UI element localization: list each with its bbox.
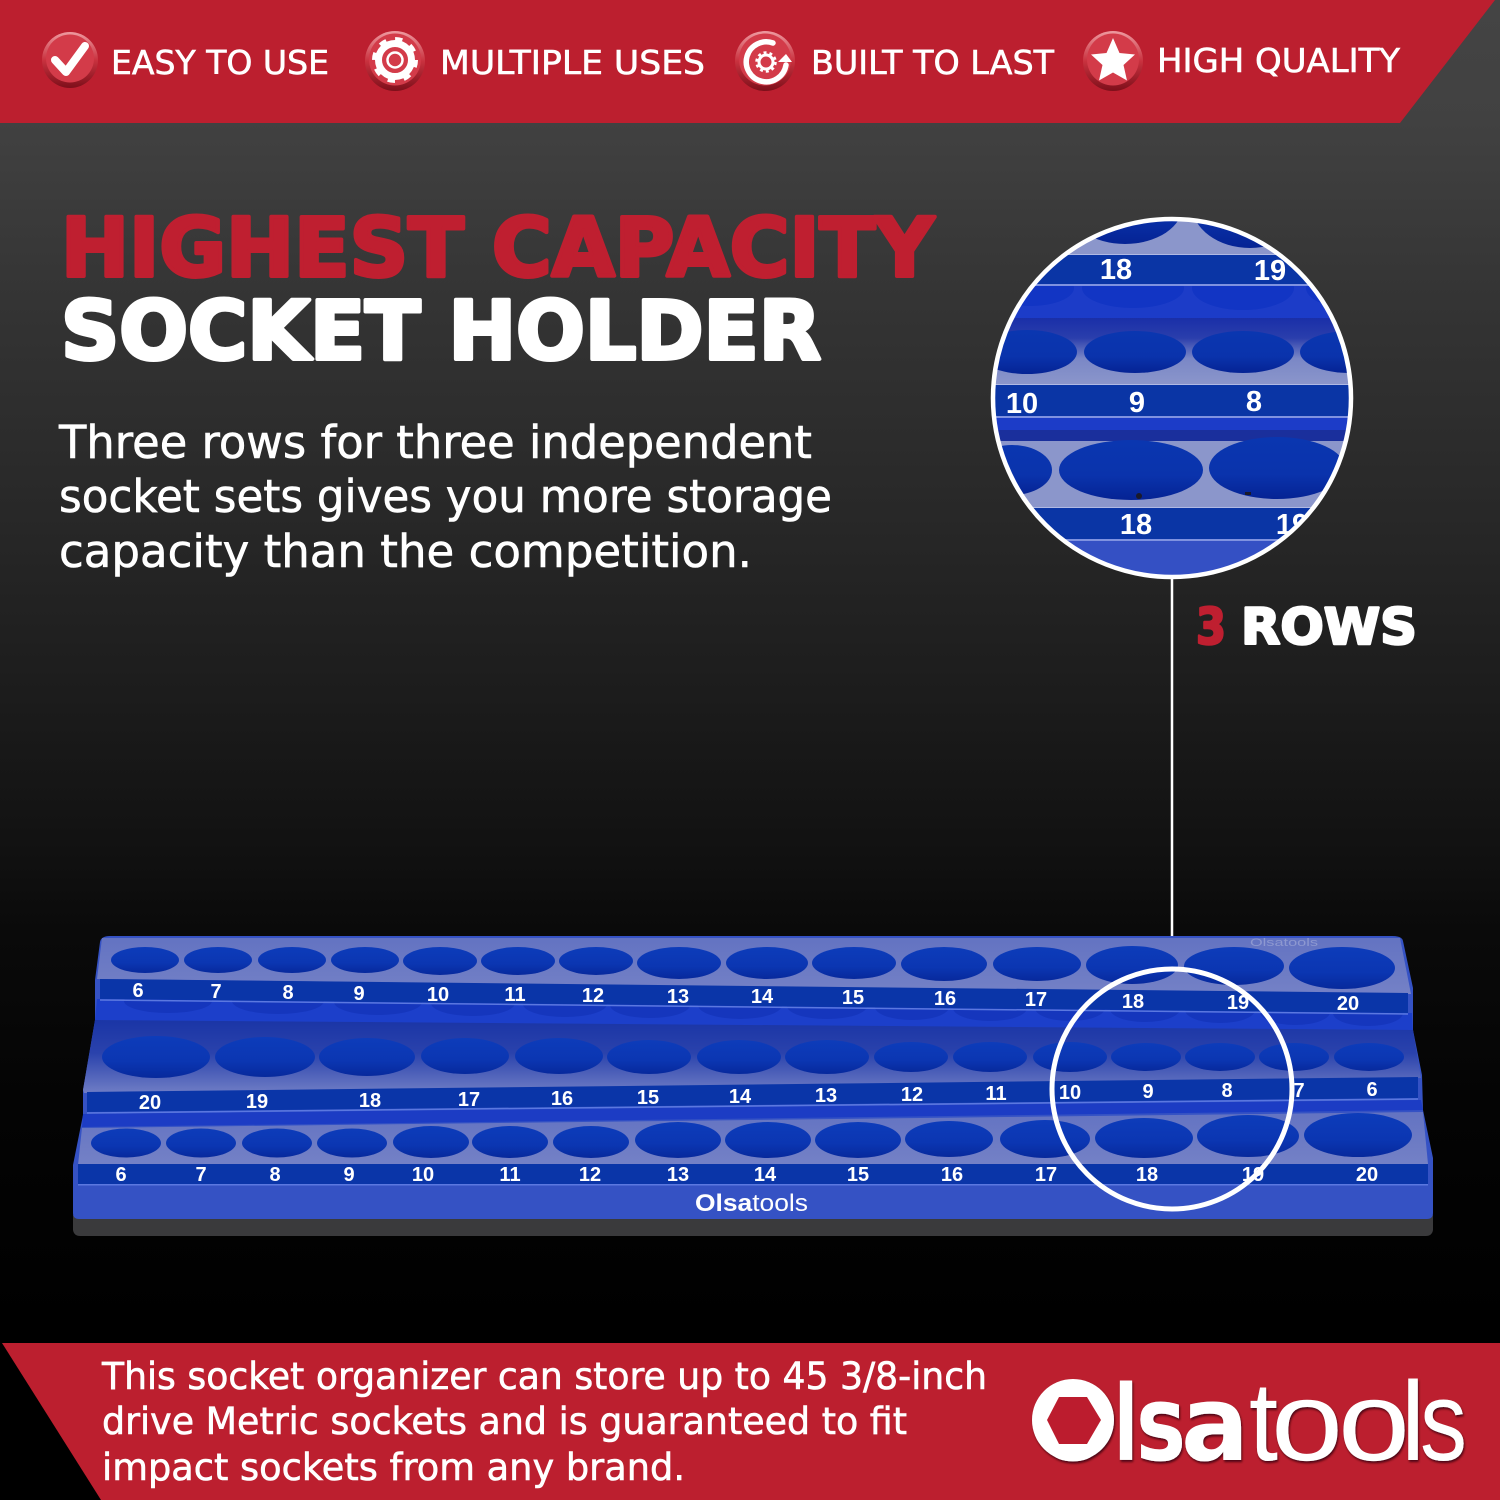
magnified detail circle: 18 xyxy=(1100,254,1132,286)
olsatools logo: s xyxy=(1136,1363,1186,1485)
olsatools logo: o xyxy=(1338,1359,1410,1484)
feature: high quality: HIGH QUALITY xyxy=(1157,41,1401,80)
holder logo small: Olsatools xyxy=(695,1190,808,1217)
middle row surface xyxy=(83,1020,1421,1093)
top row riser xyxy=(95,999,1413,1035)
middle row numbers: 14 xyxy=(729,1086,752,1108)
magnified detail circle: 8 xyxy=(1246,386,1262,418)
top row numbers xyxy=(132,980,1359,1015)
rubber base xyxy=(73,1215,1433,1236)
middle row numbers: 10 xyxy=(1059,1082,1081,1104)
body text: socket sets gives you more storage xyxy=(59,470,832,523)
middle row numbers: 8 xyxy=(1221,1080,1233,1102)
olsatools logo: l xyxy=(1401,1359,1425,1484)
bottom row numbers: 7 xyxy=(195,1164,207,1186)
top row numbers: 12 xyxy=(582,985,604,1007)
magnified detail circle: 9 xyxy=(1129,387,1145,419)
bottom row numbers xyxy=(115,1164,1378,1186)
middle row numbers: 17 xyxy=(458,1089,480,1111)
middle row numbers: 7 xyxy=(1293,1080,1305,1102)
top row numbers: 8 xyxy=(282,982,294,1004)
bottom row numbers: 18 xyxy=(1136,1164,1158,1186)
top row numbers: 7 xyxy=(210,981,222,1003)
middle row numbers: 15 xyxy=(637,1087,659,1109)
bottom row numbers: 9 xyxy=(343,1164,355,1186)
socket holder product xyxy=(73,936,1433,1236)
feature: easy to use: EASY TO USE xyxy=(111,43,329,82)
feature: built to last xyxy=(735,31,1055,91)
holder body xyxy=(73,936,1433,1219)
bottom row numbers: 15 xyxy=(847,1164,869,1186)
top row surface xyxy=(97,938,1411,994)
top row number band xyxy=(100,979,1408,1014)
olsatools logo: l xyxy=(1114,1363,1138,1485)
middle row numbers: 19 xyxy=(246,1091,268,1113)
top row numbers: 19 xyxy=(1227,992,1249,1014)
feature: easy to use xyxy=(42,32,329,88)
magnified detail circle: 19 xyxy=(1254,255,1286,287)
middle row numbers: 9 xyxy=(1142,1081,1154,1103)
middle row numbers: 16 xyxy=(551,1088,573,1110)
title: HIGHEST CAPACITY xyxy=(61,202,935,296)
bottom row number band xyxy=(78,1164,1428,1186)
olsatools logo: s xyxy=(1420,1359,1467,1484)
embossed logo: Olsatools xyxy=(1250,937,1319,949)
middle row numbers xyxy=(139,1079,1378,1114)
bottom row numbers: 20 xyxy=(1356,1164,1378,1186)
middle row lip xyxy=(82,1100,1423,1127)
middle row numbers: 6 xyxy=(1366,1079,1378,1101)
description text xyxy=(101,1355,987,1489)
middle row numbers: 18 xyxy=(359,1090,381,1112)
bottom row numbers: 19 xyxy=(1242,1164,1264,1186)
middle row numbers: 12 xyxy=(901,1084,923,1106)
top banner xyxy=(0,0,1495,123)
bottom row sockets xyxy=(91,1113,1412,1158)
olsatools logo: O xyxy=(1034,1362,1112,1485)
magnified detail circle xyxy=(990,216,1354,580)
middle row sockets xyxy=(102,1036,1404,1078)
description text: impact sockets from any brand. xyxy=(102,1446,685,1489)
olsatools logo xyxy=(1032,1359,1467,1485)
body text: capacity than the competition. xyxy=(59,525,752,578)
top row numbers: 20 xyxy=(1337,993,1359,1015)
bottom row numbers: 14 xyxy=(754,1164,777,1186)
olsatools logo: a xyxy=(1181,1363,1249,1485)
bottom banner xyxy=(2,1343,1500,1500)
olsatools logo: t xyxy=(1249,1359,1278,1484)
title: SOCKET HOLDER xyxy=(61,285,821,379)
bottom row numbers: 17 xyxy=(1035,1164,1057,1186)
description text: drive Metric sockets and is guaranteed to fit xyxy=(102,1400,907,1443)
bottom row numbers: 6 xyxy=(115,1164,127,1186)
feature: high quality xyxy=(1083,31,1401,91)
bottom row numbers: 13 xyxy=(667,1164,689,1186)
top row numbers: 9 xyxy=(353,983,365,1005)
feature: multiple uses: MULTIPLE USES xyxy=(440,43,705,82)
bottom row numbers: 16 xyxy=(941,1164,963,1186)
middle row numbers: 20 xyxy=(139,1092,161,1114)
3 rows label: ROWS xyxy=(1241,598,1417,656)
holder magnifier ring xyxy=(1052,969,1292,1209)
bottom row numbers: 8 xyxy=(269,1164,281,1186)
top row numbers: 10 xyxy=(427,984,449,1006)
middle row numbers: 11 xyxy=(985,1083,1007,1105)
magnified detail circle: 10 xyxy=(1006,388,1038,420)
connector line xyxy=(1171,576,1173,968)
magnified detail circle: 18 xyxy=(1120,509,1152,541)
magnified detail circle: 19 xyxy=(1276,509,1308,541)
top row numbers: 13 xyxy=(667,986,689,1008)
3 rows label: 3 xyxy=(1196,598,1226,656)
feature: multiple uses xyxy=(365,31,705,91)
top row numbers: 6 xyxy=(132,980,144,1002)
top row numbers: 15 xyxy=(842,987,864,1009)
body text xyxy=(58,416,832,578)
bottom row numbers: 10 xyxy=(412,1164,434,1186)
title xyxy=(61,202,935,379)
body text: Three rows for three independent xyxy=(58,416,812,469)
middle row numbers: 13 xyxy=(815,1085,837,1107)
bottom row numbers: 12 xyxy=(579,1164,601,1186)
feature: built to last: BUILT TO LAST xyxy=(811,43,1055,82)
top row numbers: 18 xyxy=(1122,991,1144,1013)
top row numbers: 17 xyxy=(1025,989,1047,1011)
bottom row numbers: 11 xyxy=(499,1164,521,1186)
top row numbers: 14 xyxy=(751,986,774,1008)
top row numbers: 11 xyxy=(504,984,526,1006)
top row numbers: 16 xyxy=(934,988,956,1010)
bottom row surface xyxy=(78,1112,1428,1165)
olsatools logo: o xyxy=(1271,1359,1343,1484)
middle row number band xyxy=(87,1077,1418,1113)
description text: This socket organizer can store up to 45 3/8-inch xyxy=(101,1355,987,1398)
top row sockets xyxy=(111,946,1395,989)
